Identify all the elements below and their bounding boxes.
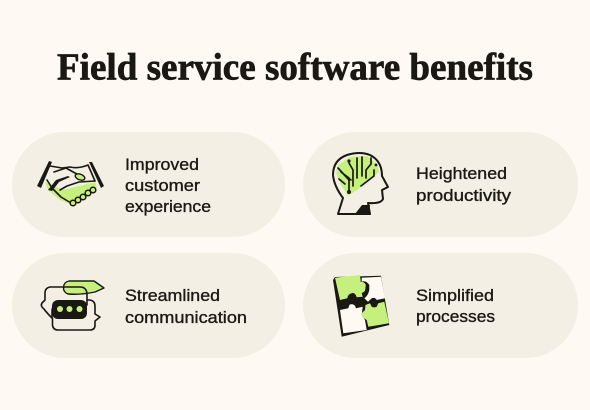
label: heightened productivity: Heightened [416, 164, 507, 183]
label: simplified processes: processes [416, 307, 495, 326]
icon: head with circuit brain [333, 153, 388, 214]
icon: puzzle [333, 275, 389, 337]
label: heightened productivity [416, 164, 512, 205]
label: simplified processes [416, 286, 495, 326]
label: simplified processes: Simplified [416, 286, 494, 305]
label: heightened productivity: productivity [416, 186, 512, 205]
label: improved customer experience [125, 155, 211, 216]
label: improved customer experience: Improved [125, 155, 199, 174]
label: streamlined communication: Streamlined [125, 286, 220, 305]
title: Field service software benefits [57, 46, 533, 88]
panel: improved customer experience [12, 132, 285, 237]
icon: handshake [37, 161, 104, 206]
panel: heightened productivity [303, 132, 578, 237]
label: streamlined communication [125, 286, 247, 327]
icon: chat bubbles [41, 281, 104, 330]
panel: simplified processes [303, 253, 578, 358]
label: improved customer experience: customer [125, 176, 200, 195]
label: streamlined communication: communication [125, 308, 247, 327]
panel: streamlined communication [12, 253, 285, 358]
label: improved customer experience: experience [125, 197, 211, 216]
